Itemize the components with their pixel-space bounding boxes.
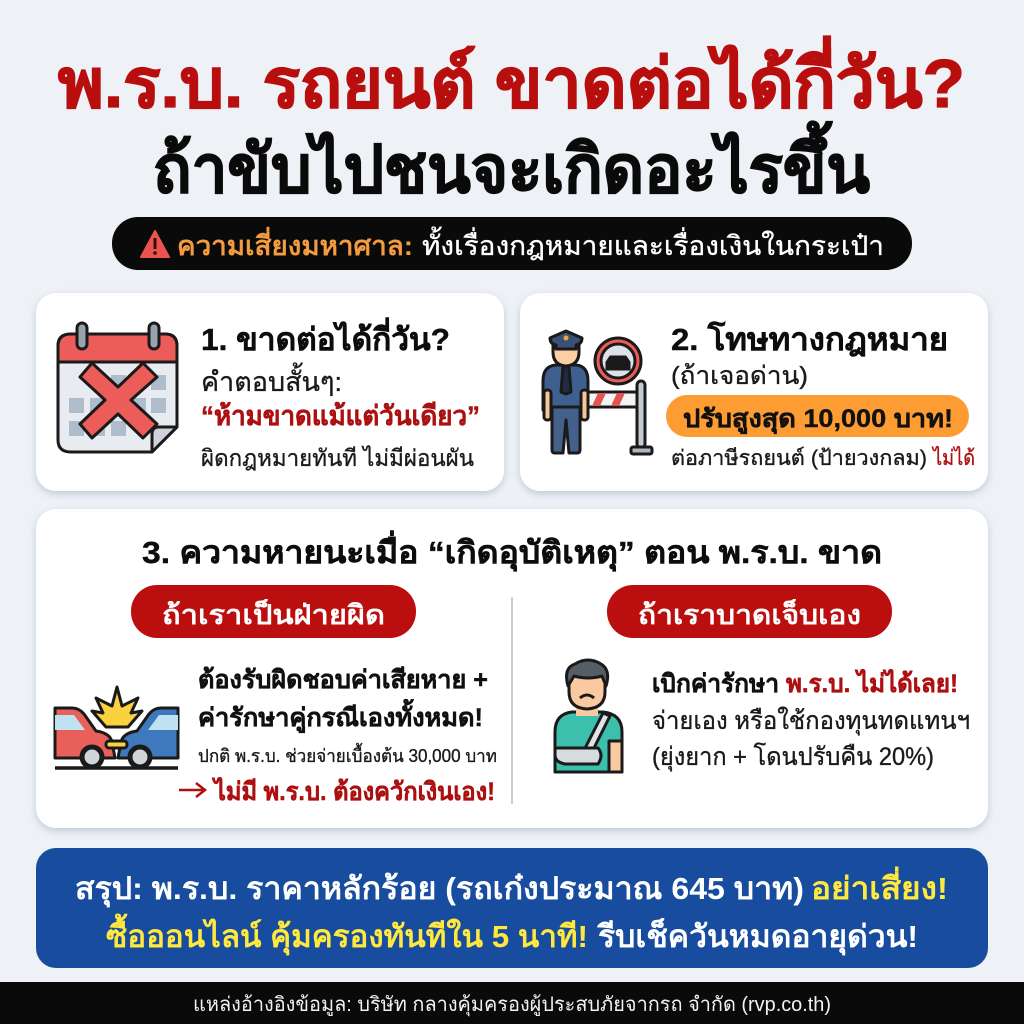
at-fault text: ปกติ พ.ร.บ. ช่วยจ่ายเบื้องต้น 30,000 บาท <box>198 743 497 766</box>
injured text <box>652 668 970 772</box>
pill: at fault: ถ้าเราเป็นฝ่ายผิด <box>162 597 385 630</box>
footer source bar: แหล่งอ้างอิงข้อมูล: บริษัท กลางคุ้มครองผู้ประสบภัยจากรถ จำกัด (rvp.co.th) <box>193 994 831 1017</box>
panel: 3 accident damages <box>36 509 988 828</box>
warning banner: ทั้งเรื่องกฎหมายและเรื่องเงินในกระเป๋า <box>422 226 884 261</box>
panel: summary: สรุป: พ.ร.บ. ราคาหลักร้อย (รถเก๋งประมาณ 645 บาท) <box>75 871 804 908</box>
short answer: “ห้ามขาดแม้แต่วันเดียว” <box>201 401 480 431</box>
pill: injured <box>607 585 892 638</box>
panel: summary: ซื้อออนไลน์ คุ้มครองทันทีใน 5 นาที! <box>106 913 588 956</box>
footer source bar <box>0 982 1024 1024</box>
icon: police officer at checkpoint <box>543 331 652 454</box>
pill: at fault <box>131 585 416 638</box>
pill: injured: ถ้าเราบาดเจ็บเอง <box>638 597 861 630</box>
warning banner <box>112 217 912 270</box>
icon: calendar with X <box>58 323 177 452</box>
at-fault text: ต้องรับผิดชอบค่าเสียหาย + <box>198 666 488 694</box>
title <box>58 35 965 206</box>
warning banner: ความเสี่ยงมหาศาล: <box>177 226 413 261</box>
title: ถ้าขับไปชนจะเกิดอะไรขึ้น <box>153 120 870 206</box>
injured text: (ยุ่งยาก + โดนปรับคืน 20%) <box>652 742 934 772</box>
short answer: คำตอบสั้นๆ: <box>201 362 342 397</box>
injured text: จ่ายเอง หรือใช้กองทุนทดแทนฯ <box>652 706 970 736</box>
at-fault text: ไม่มี พ.ร.บ. ต้องควักเงินเอง! <box>211 776 495 806</box>
short answer: ผิดกฎหมายทันที ไม่มีผ่อนผัน <box>201 445 474 471</box>
panel: 1 how many days <box>36 293 504 491</box>
fine pill <box>666 395 969 437</box>
panel: 2 legal penalty <box>520 293 988 491</box>
at-fault text: ค่ารักษาคู่กรณีเองทั้งหมด! <box>198 698 483 734</box>
fine pill: ปรับสูงสุด 10,000 บาท! <box>683 405 953 435</box>
panel: summary <box>36 848 988 968</box>
injured text: เบิกค่ารักษา <box>652 670 779 698</box>
panel: summary: รีบเช็ควันหมดอายุด่วน! <box>597 917 918 956</box>
icon: warning triangle <box>141 231 169 257</box>
heading 2: 2. โทษทางกฎหมาย <box>671 321 948 357</box>
short answer <box>201 362 480 471</box>
icon: car crash <box>55 687 178 768</box>
heading 3: 3. ความหายนะเมื่อ “เกิดอุบัติเหตุ” ตอน พ.ร.บ. ขาด <box>142 530 882 572</box>
at-fault text <box>179 666 497 806</box>
injured text: พ.ร.บ. ไม่ได้เลย! <box>786 668 958 698</box>
tax note: ไม่ได้ <box>931 446 975 470</box>
heading 2: (ถ้าเจอด่าน) <box>671 362 808 390</box>
panel: summary: อย่าเสี่ยง! <box>811 866 948 906</box>
title: พ.ร.บ. รถยนต์ ขาดต่อได้กี่วัน? <box>58 35 965 122</box>
arrow <box>179 783 205 797</box>
heading 2 <box>671 321 948 390</box>
heading 1: 1. ขาดต่อได้กี่วัน? <box>201 317 450 357</box>
tax note: ต่อภาษีรถยนต์ (ป้ายวงกลม) <box>671 446 927 470</box>
icon: injured man with sling <box>555 660 622 772</box>
